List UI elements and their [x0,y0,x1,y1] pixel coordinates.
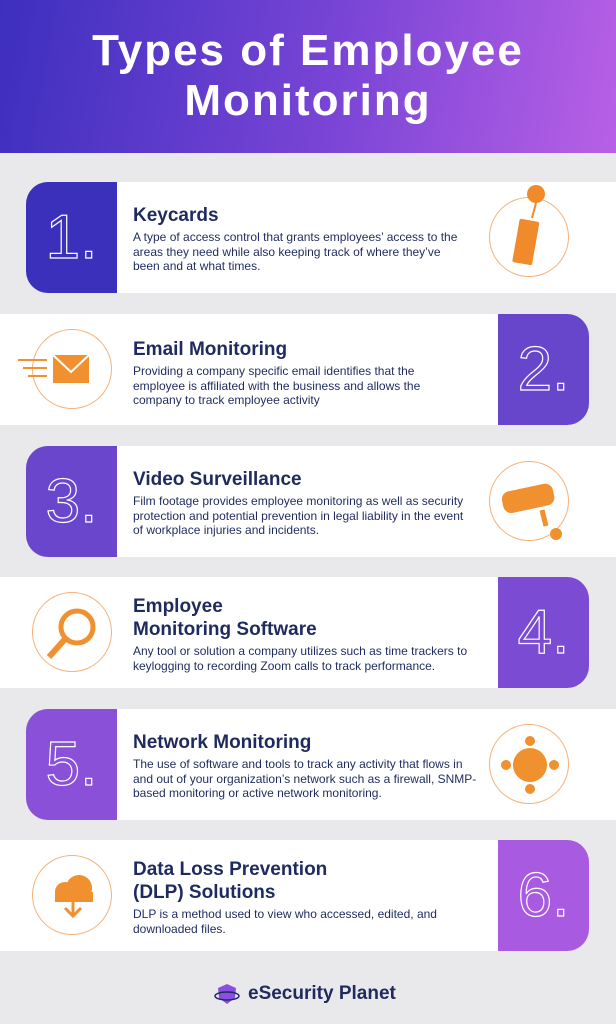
logo: eSecurity Planet [248,983,396,1004]
text: video: Film footage provides employee monitoring as well as security protection and potential prevention in legal liability in the event of workplace injuries and incidents. [133,494,463,537]
text: network [133,732,476,800]
text: keycards: A type of access control that grants employees’ access to the areas they need while also keeping track of where they’ve been and at what times. [133,230,457,273]
text: email [133,339,420,407]
icon: cloud download [32,855,112,935]
text: email: Providing a company specific email identifies that the employee is affiliated with the business and allows the company to track employee activity [133,364,420,407]
text: keycards: Keycards [133,205,219,226]
text: DLP: (DLP) Solutions [133,882,275,903]
icon: camera [489,461,569,541]
text: DLP: DLP is a method used to view who accessed, edited, and downloaded files. [133,907,437,936]
icon: keycard [489,197,569,277]
text: DLP: Data Loss Prevention [133,859,327,880]
text: video [133,469,464,537]
panel: video [26,446,616,557]
panel: network [26,709,616,820]
panel: software [0,577,589,688]
text: software [133,596,467,672]
number 2 [498,314,589,425]
panel: DLP [0,840,589,951]
text: email: Email Monitoring [133,339,287,360]
text: network: The use of software and tools to track any activity that flows in and out of your organization’s network such as a firewall, SNMP-based monitoring or active network monitoring. [133,757,476,800]
panel: keycards [26,182,616,293]
number 4 [498,577,589,688]
icon: email [32,329,112,409]
title [0,0,616,153]
text: software: Employee [133,596,223,617]
text: network: Network Monitoring [133,732,311,753]
panel: email [0,314,589,425]
icon: magnifier [32,592,112,672]
number 3 [26,446,117,557]
number 5 [26,709,117,820]
icon: globe [489,724,569,804]
number 6 [498,840,589,951]
text: keycards [133,205,457,273]
text: software: Any tool or solution a company utilizes such as time trackers to keylogging to recording Zoom calls to track performance. [133,644,467,672]
number 1 [26,182,117,293]
text: video: Video Surveillance [133,469,302,490]
text: DLP [133,859,437,936]
title: Types of Employee [92,26,524,75]
text: software: Monitoring Software [133,619,317,640]
title: Monitoring [184,76,432,125]
